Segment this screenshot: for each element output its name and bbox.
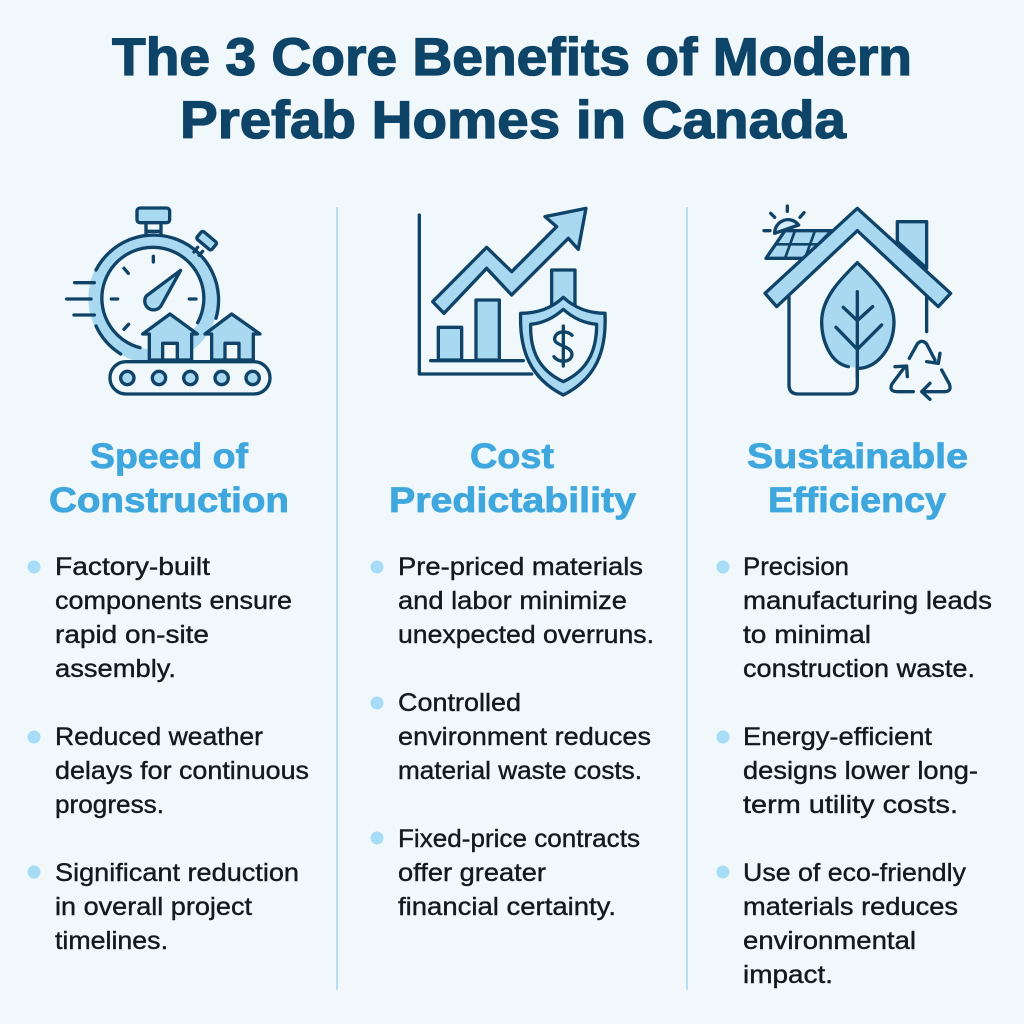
bullet list: speed of construction: delays for continuous	[55, 757, 309, 785]
bullet list: cost predictability: financial certainty.	[398, 893, 616, 921]
bullet list: sustainable efficiency: manufacturing leads	[743, 587, 992, 615]
panel: cost predictability	[370, 208, 654, 921]
title	[112, 28, 912, 150]
heading: speed of construction: Speed of	[90, 436, 248, 476]
bullet list: speed of construction: progress.	[55, 791, 164, 819]
bullet list: speed of construction: Significant reduction	[55, 859, 299, 887]
heading: sustainable efficiency: Efficiency	[768, 480, 946, 520]
title: Prefab Homes in Canada	[180, 91, 847, 150]
bullet list: speed of construction	[28, 553, 309, 955]
bullet list: sustainable efficiency: Energy-efficient	[743, 723, 932, 751]
heading: sustainable efficiency	[747, 436, 968, 520]
bullet list: speed of construction: in overall project	[55, 893, 252, 921]
bullet list: cost predictability: Controlled	[398, 689, 521, 717]
bullet list: cost predictability: and labor minimize	[398, 587, 627, 615]
bullet list: cost predictability: offer greater	[398, 859, 546, 887]
bullet list: sustainable efficiency: Precision	[743, 553, 849, 581]
panel: speed of construction	[28, 208, 309, 955]
heading: sustainable efficiency: Sustainable	[747, 436, 968, 476]
heading: speed of construction: Construction	[49, 480, 289, 520]
bullet list: speed of construction: assembly.	[55, 655, 176, 683]
bullet list: speed of construction: rapid on-site	[55, 621, 209, 649]
bullet list: cost predictability: environment reduces	[398, 723, 651, 751]
bullet list: sustainable efficiency: designs lower long-	[743, 757, 978, 785]
bullet list: sustainable efficiency: impact.	[743, 961, 833, 989]
bullet list: cost predictability: unexpected overruns.	[398, 621, 654, 649]
heading: cost predictability: Cost	[470, 436, 554, 476]
bullet list: sustainable efficiency: materials reduces	[743, 893, 958, 921]
bullet list: speed of construction: timelines.	[55, 927, 168, 955]
bullet list: sustainable efficiency	[716, 553, 992, 989]
bullet list: sustainable efficiency: Use of eco-friendly	[743, 859, 967, 887]
bullet list: speed of construction: Reduced weather	[55, 723, 263, 751]
heading: cost predictability	[389, 436, 636, 520]
panel: sustainable efficiency	[716, 206, 992, 989]
bullet list: sustainable efficiency: term utility costs.	[743, 791, 958, 819]
bullet list: cost predictability	[370, 553, 654, 921]
bullet list: speed of construction: Factory-built	[55, 553, 210, 581]
icon: rising chart with dollar shield	[419, 208, 605, 395]
bullet list: sustainable efficiency: construction waste.	[743, 655, 975, 683]
bullet list: cost predictability: Pre-priced materials	[398, 553, 643, 581]
bullet list: sustainable efficiency: environmental	[743, 927, 916, 955]
bullet list: cost predictability: Fixed-price contracts	[398, 825, 640, 853]
icon: stopwatch with houses on a conveyor	[67, 208, 270, 394]
heading: speed of construction	[49, 436, 289, 520]
bullet list: cost predictability: material waste costs.	[398, 757, 642, 785]
icon: eco house with solar panel, leaf and recycling arrows	[764, 206, 951, 399]
heading: cost predictability: Predictability	[389, 480, 636, 520]
title: The 3 Core Benefits of Modern	[112, 28, 912, 87]
bullet list: speed of construction: components ensure	[55, 587, 292, 615]
bullet list: sustainable efficiency: to minimal	[743, 621, 871, 649]
